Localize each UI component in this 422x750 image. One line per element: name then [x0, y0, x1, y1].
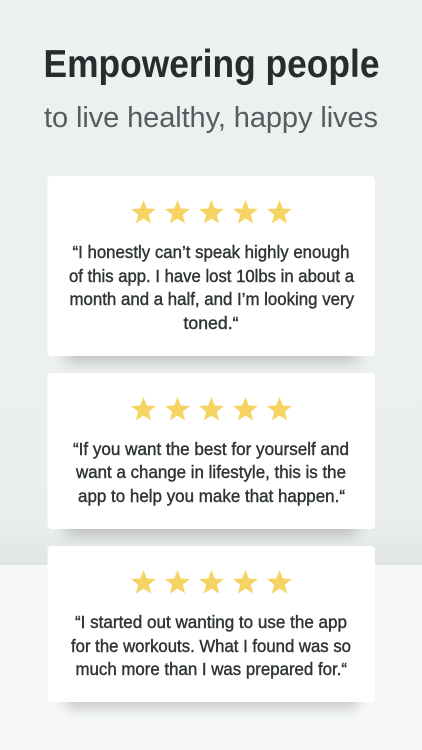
review text 1: of this app. I have lost 10lbs in about a: [69, 266, 354, 286]
review text 2: app to help you make that happen.“: [78, 486, 345, 506]
background floor: [0, 565, 422, 750]
panel: review card 2: [48, 373, 375, 535]
background wall: [0, 0, 422, 565]
subtitle: to live healthy, happy lives: [44, 102, 378, 134]
review text 1: [69, 242, 354, 333]
panel: review card 3: [48, 546, 375, 708]
panel: review card 1: [48, 176, 375, 362]
review text 2: “If you want the best for yourself and: [73, 439, 349, 459]
review text 3: “I started out wanting to use the app: [75, 612, 347, 632]
title: Empowering people: [44, 43, 380, 86]
review text 1: month and a half, and I’m looking very: [70, 289, 354, 309]
review text 1: toned.“: [184, 313, 239, 333]
icon: five stars rating: [131, 570, 292, 594]
review text 3: much more than I was prepared for.“: [76, 659, 347, 679]
review text 3: for the workouts. What I found was so: [71, 636, 351, 656]
review text 2: [73, 439, 349, 506]
icon: five stars rating: [131, 200, 292, 224]
icon: five stars rating: [131, 397, 292, 421]
review text 3: [71, 612, 351, 679]
review text 1: “I honestly can’t speak highly enough: [72, 242, 350, 262]
review text 2: want a change in lifestyle, this is the: [75, 462, 346, 482]
